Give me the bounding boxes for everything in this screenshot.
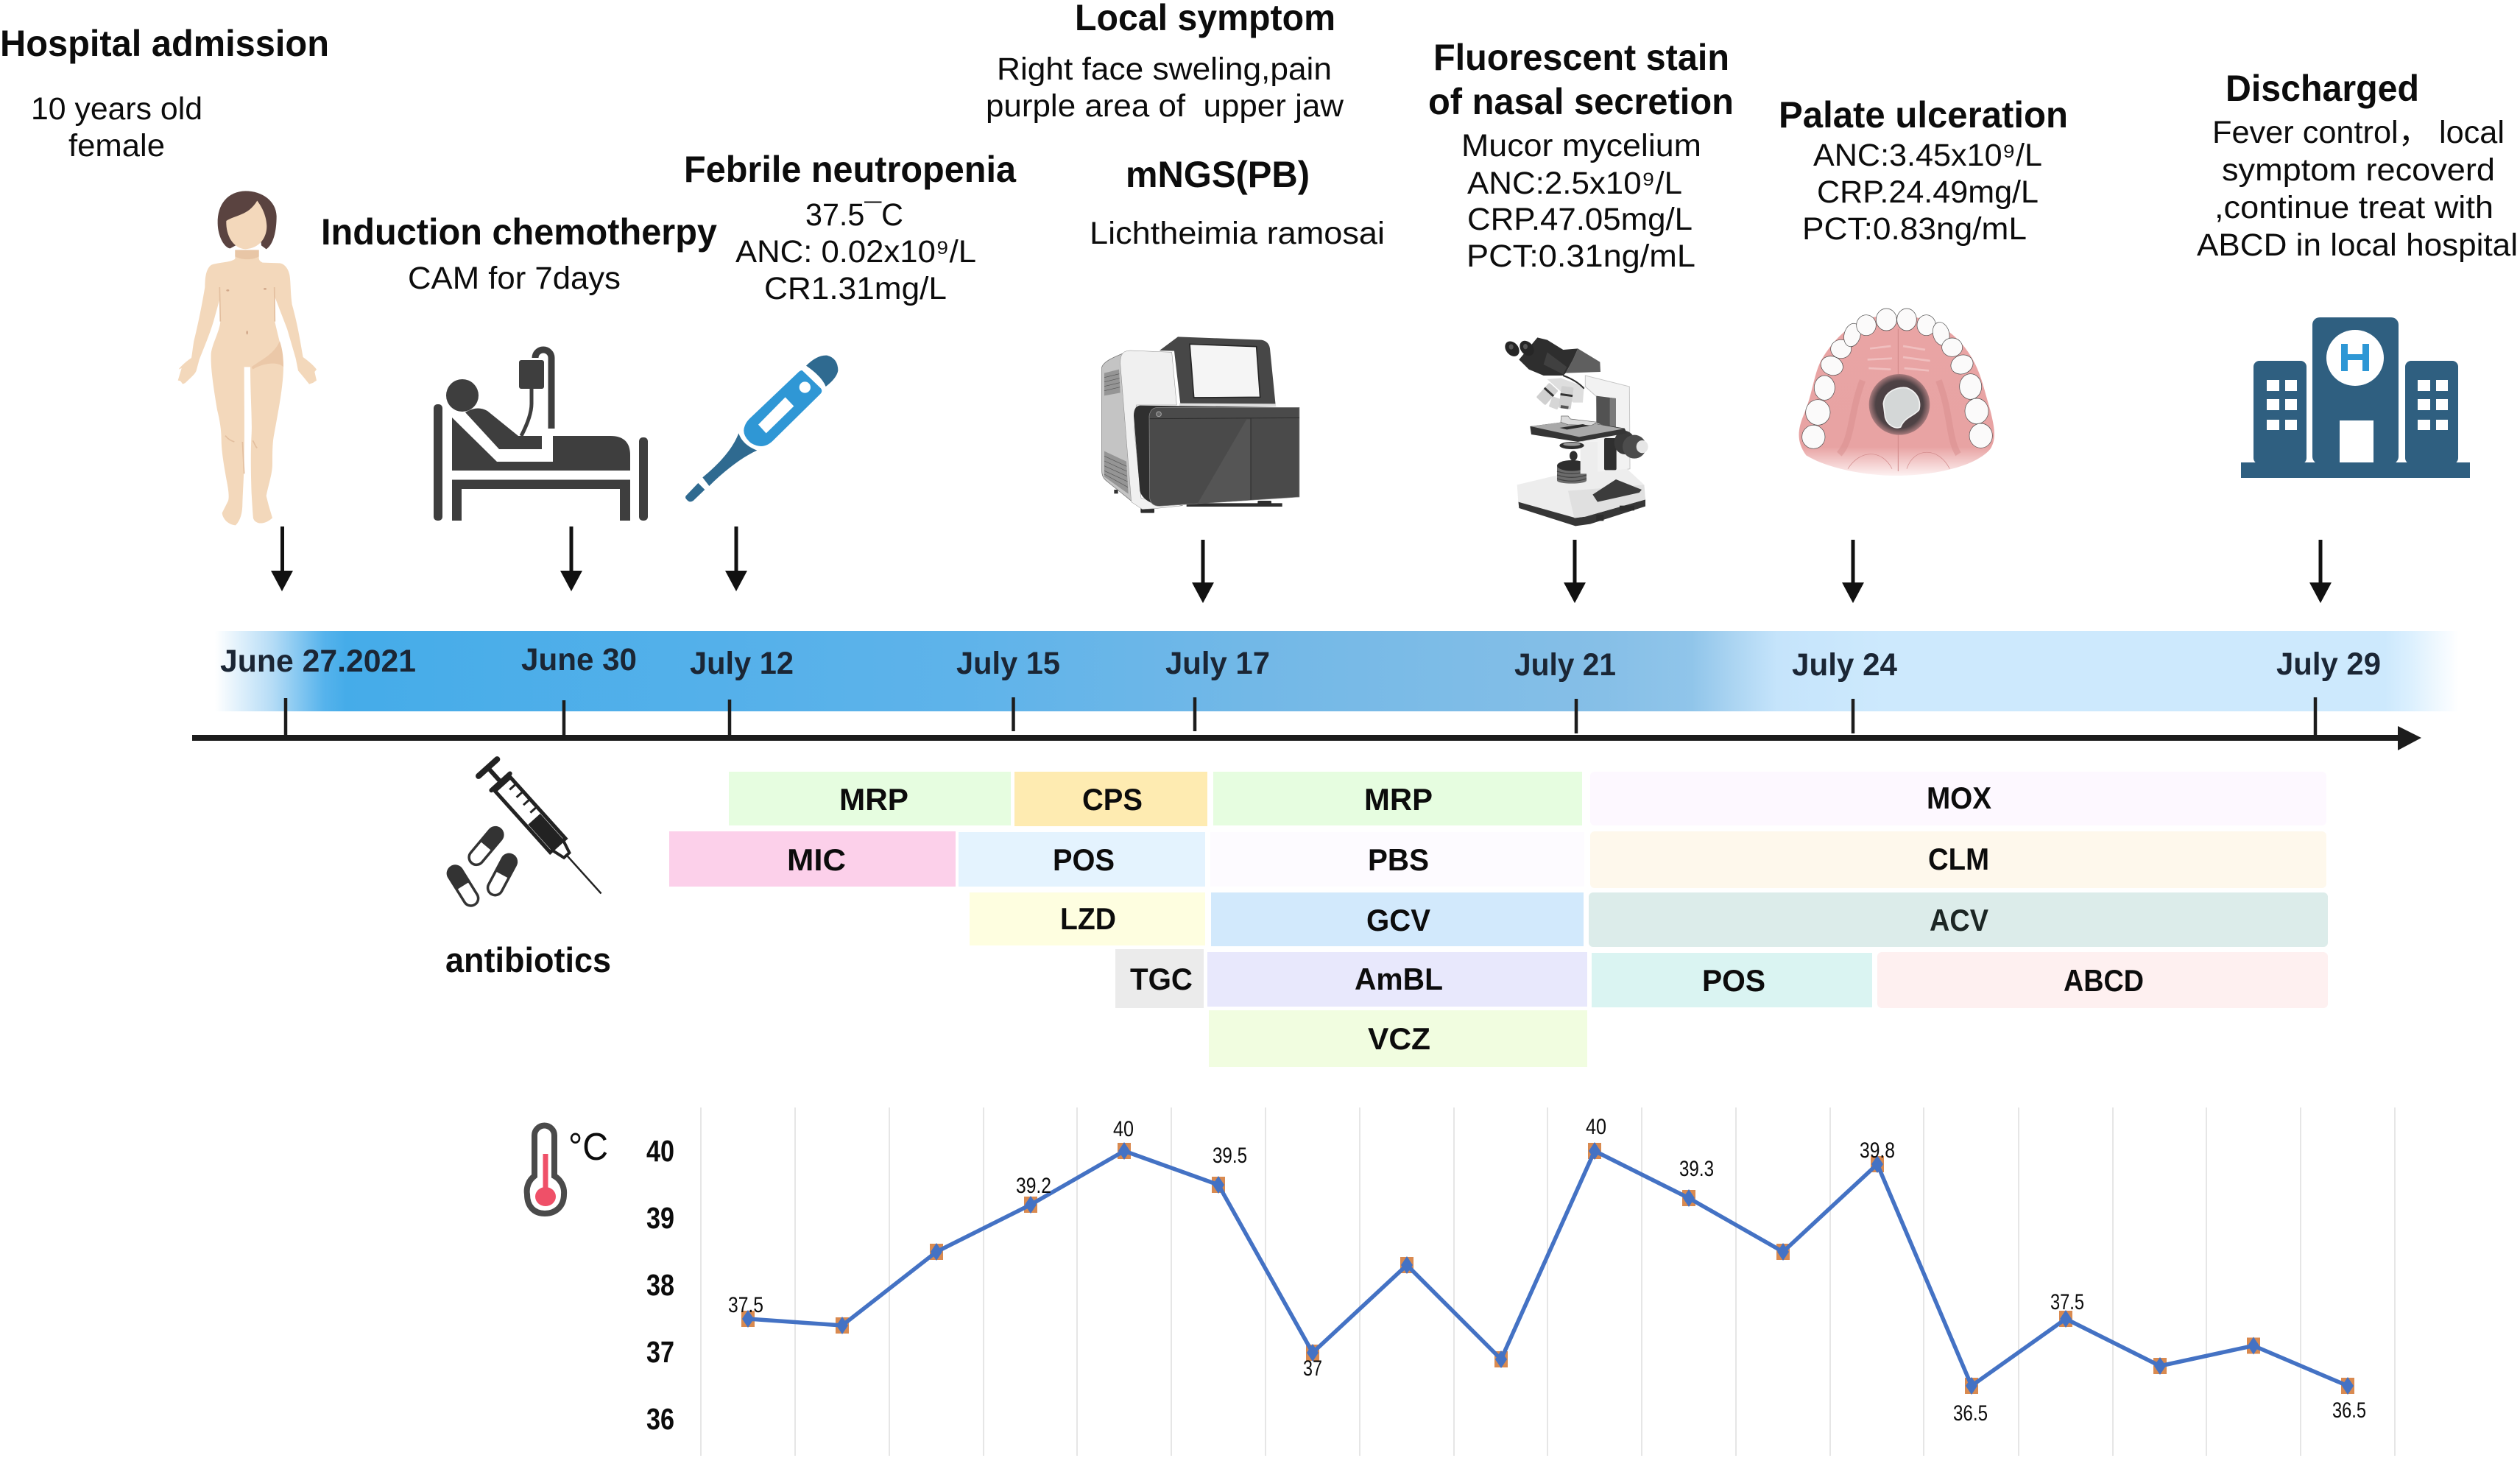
data labels: 39.5 (1213, 1144, 1247, 1168)
heading: fluorescent stain of nasal secretion: of nasal secretion (1428, 81, 1734, 122)
bar: ABCD (1877, 952, 2328, 1008)
text: stain findings and labs: Mucor mycelium (1461, 128, 1701, 163)
icon: female patient figure (178, 191, 317, 525)
date labels: July 21 (1514, 647, 1616, 683)
icon: capsule 2 (445, 863, 481, 909)
bar: CPS (1014, 772, 1207, 826)
text: pathogen: Lichtheimia ramosai (1090, 216, 1385, 251)
text: age and sex: 10 years old (31, 91, 202, 127)
bar: CLM (1590, 831, 2326, 888)
data labels: 39.2 (1016, 1174, 1051, 1198)
y axis labels: 40 (646, 1134, 674, 1168)
text: discharge notes: ABCD in local hospital (2197, 228, 2518, 263)
text: age and sex (31, 91, 202, 163)
bar: MRP (729, 772, 1011, 825)
data labels: 37.5 (2050, 1290, 2084, 1314)
data labels: 36.5 (2332, 1398, 2366, 1423)
text: symptom description: purple area of upper jaw (986, 88, 1344, 124)
heading: fluorescent stain of nasal secretion: Fluorescent stain (1433, 37, 1729, 78)
arrow: July 12 (725, 526, 747, 591)
icon: syringe (479, 759, 610, 902)
y axis labels: 37 (646, 1335, 674, 1369)
bar: GCV: GCV (1366, 903, 1430, 937)
bar: MIC: MIC (787, 842, 846, 877)
data labels: 40 (1113, 1117, 1134, 1141)
bar: VCZ (1209, 1010, 1587, 1067)
data labels: 39.8 (1860, 1138, 1895, 1163)
markers: orange squares (741, 1143, 2354, 1394)
bar: AmBL (1207, 952, 1587, 1007)
heading: induction chemotherapy: Induction chemotherpy (321, 211, 717, 253)
bar: AmBL: AmBL (1355, 962, 1443, 996)
heading: discharged: Discharged (2226, 68, 2419, 109)
data labels: 37 (1303, 1356, 1322, 1381)
bar: MIC (669, 831, 956, 887)
icon: capsule 1 (466, 825, 506, 867)
date labels: July 17 (1165, 646, 1270, 681)
temperature line (748, 1151, 2348, 1386)
event: fluorescent stain (1428, 37, 1734, 526)
text: discharge notes (2197, 115, 2518, 263)
arrow: July 17 (1192, 540, 1214, 603)
arrow: July 24 (1842, 540, 1864, 603)
icon: microscope (1502, 337, 1648, 526)
event: local symptom and mNGS (986, 0, 1385, 513)
heading: hospital admission: Hospital admission (0, 23, 329, 64)
heading: palate ulceration: Palate ulceration (1779, 94, 2068, 135)
bar: MRP: MRP (839, 782, 908, 817)
unit label: degrees Celsius: °C (568, 1126, 608, 1169)
bar: CLM: CLM (1928, 842, 1989, 876)
bar: VCZ: VCZ (1368, 1021, 1430, 1056)
bar: TGC (1115, 949, 1204, 1008)
event: discharged (2197, 68, 2518, 478)
arrows: events to timeline (271, 526, 2332, 603)
text: temperature and labs: CR1.31mg/L (764, 271, 947, 306)
bar: POS late (1592, 953, 1872, 1007)
date labels (220, 642, 2381, 683)
text: stain findings and labs: PCT:0.31ng/mL (1467, 239, 1695, 274)
date labels: June 27.2021 (220, 644, 416, 679)
label: antibiotics: antibiotics (445, 940, 611, 979)
icon: sequencer machine (1102, 337, 1299, 513)
bar: MOX: MOX (1927, 781, 1991, 815)
data labels: 40 (1586, 1115, 1606, 1139)
heading: fluorescent stain of nasal secretion (1428, 37, 1734, 122)
text: symptom description: Right face sweling,pain (997, 52, 1332, 87)
y axis labels: 39 (646, 1201, 674, 1235)
data labels: 37.5 (728, 1293, 763, 1317)
text: age and sex: female (68, 128, 165, 163)
date labels: June 30 (521, 642, 637, 677)
bar: POS early (959, 832, 1205, 887)
bar: LZD (970, 892, 1205, 945)
bar: TGC: TGC (1130, 962, 1193, 996)
text: temperature and labs (735, 197, 976, 306)
text: stain findings and labs: CRP.47.05mg/L (1467, 202, 1693, 237)
y axis labels: 36 (646, 1402, 674, 1436)
bar: PBS (1210, 832, 1584, 887)
text: temperature and labs: 37.5¯C (805, 197, 903, 233)
y axis labels (646, 1134, 674, 1436)
text: labs: ANC:3.45x10⁹/L (1813, 138, 2042, 173)
arrow: July 29 (2309, 540, 2332, 603)
event: induction chemotherapy (321, 211, 717, 521)
icon: syringe and capsules (445, 759, 610, 909)
bar: MRP second course (1213, 772, 1582, 825)
icon: patient in bed with IV (434, 350, 648, 521)
text: symptom description (986, 52, 1344, 124)
bar: GCV (1211, 892, 1584, 946)
text: temperature and labs: ANC: 0.02x10⁹/L (735, 234, 976, 270)
heading: mNGS: mNGS(PB) (1126, 154, 1310, 195)
bar: MOX (1590, 772, 2326, 825)
text: labs: PCT:0.83ng/mL (1802, 211, 2027, 247)
heading: febrile neutropenia: Febrile neutropenia (684, 149, 1017, 190)
bar: POS early: POS (1053, 842, 1115, 877)
bar: ACV: ACV (1930, 903, 1988, 937)
event: palate ulceration (1779, 94, 2068, 476)
text: stain findings and labs (1461, 128, 1701, 274)
date labels: July 15 (956, 646, 1060, 681)
arrow: July 21 (1564, 540, 1586, 603)
y axis labels: 38 (646, 1268, 674, 1302)
text: discharge notes: symptom recoverd (2222, 152, 2495, 188)
drug bars (669, 772, 2328, 1067)
icon: digital thermometer (685, 356, 838, 501)
bar: ACV (1589, 892, 2328, 947)
icon: capsule 3 (485, 852, 519, 898)
event: febrile neutropenia (684, 149, 1017, 501)
text: regimen: CAM for 7days (408, 261, 621, 296)
bar: ABCD: ABCD (2064, 963, 2144, 998)
text: discharge notes: Fever control， local (2212, 115, 2505, 150)
icon: hospital building (2241, 317, 2470, 478)
data labels: 36.5 (1953, 1401, 1988, 1426)
data labels: 39.3 (1679, 1157, 1714, 1181)
event: hospital admission (0, 23, 329, 525)
text: labs (1802, 138, 2042, 247)
bar: CPS: CPS (1082, 782, 1143, 817)
line chart: body temperature (701, 1107, 2395, 1456)
text: discharge notes: ,continue treat with (2214, 190, 2493, 225)
icon: palate with ulcer (1799, 309, 1994, 476)
bar: PBS: PBS (1368, 842, 1429, 877)
text: stain findings and labs: ANC:2.5x10⁹/L (1467, 166, 1682, 201)
timeline axis with ticks (192, 697, 2421, 750)
date labels: July 29 (2276, 647, 2381, 682)
arrow: June 30 (560, 526, 582, 591)
bar: MRP second course: MRP (1364, 782, 1433, 817)
data labels (728, 1115, 2366, 1426)
icon: temperature thermometer (527, 1125, 564, 1214)
bar: LZD: LZD (1060, 901, 1116, 936)
timeline band (215, 631, 2459, 711)
arrow: June 27 (271, 526, 293, 591)
date labels: July 24 (1792, 647, 1897, 683)
bar: POS late: POS (1702, 963, 1765, 998)
markers: blue diamonds (742, 1142, 2354, 1395)
text: labs: CRP.24.49mg/L (1817, 175, 2039, 210)
date labels: July 12 (690, 646, 794, 681)
